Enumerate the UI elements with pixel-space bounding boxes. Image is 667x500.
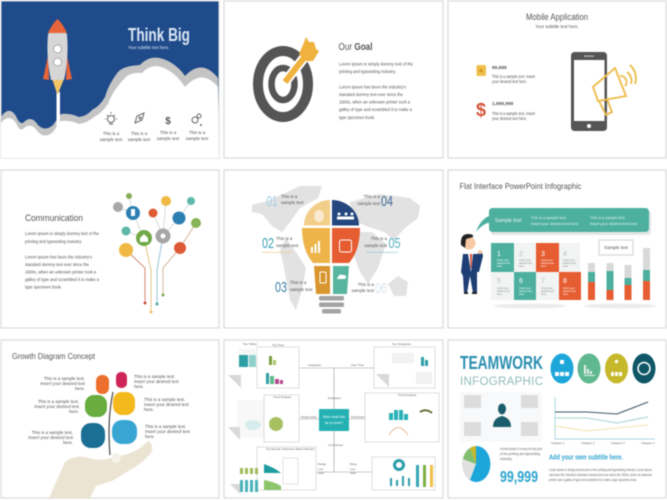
icon: megaphone xyxy=(593,65,636,115)
puzzle grid: Insert your xyxy=(563,259,575,262)
connector labels: Comparison xyxy=(328,443,344,447)
label group xyxy=(100,130,209,142)
subtitle: Your subtitle text here. xyxy=(128,45,170,50)
connector lines xyxy=(299,368,374,472)
puzzle grid: Insert your xyxy=(519,259,531,262)
left labels: This is a sample text. xyxy=(32,430,73,435)
title: growth diagram: Growth Diagram Concept xyxy=(12,351,96,361)
chart card: bottom left: Top Results: Reference Metric Affected xyxy=(266,447,315,451)
left labels: This is a sample text. xyxy=(38,399,79,404)
leaves xyxy=(81,372,137,448)
banner: Insert your desired text here. xyxy=(531,222,579,226)
right labels xyxy=(134,374,190,439)
center box: Who must this xyxy=(323,415,345,419)
puzzle grid: 1 xyxy=(497,251,501,258)
puzzle grid: desired text xyxy=(563,262,576,265)
label 02: sample text xyxy=(276,243,299,248)
body text: Lorem Ipsum is simply dummy text of the xyxy=(339,62,414,66)
stat: 1,999,999: This is a sample text. Insert xyxy=(492,111,536,116)
banner: Sample text xyxy=(495,218,522,224)
line chart: Category 2 xyxy=(581,441,595,445)
puzzle grid xyxy=(491,243,581,300)
label group: This is a xyxy=(189,130,206,135)
connector labels: Relationship xyxy=(301,415,317,419)
line chart: Category 1 xyxy=(551,441,565,445)
connector labels: Many xyxy=(350,462,357,466)
line chart: Category 3 xyxy=(611,441,625,445)
title: our goal: Our Goal xyxy=(338,42,373,53)
puzzle grid: desired text xyxy=(497,290,510,293)
label group: sample text xyxy=(157,136,180,141)
label 05: 05 xyxy=(388,235,400,252)
body text: Lorem Ipsum has been the industry's xyxy=(25,254,93,260)
pie caption: industry. xyxy=(500,457,513,461)
title: flat interface: Flat Interface PowerPoint Infographic xyxy=(460,181,582,191)
banner: This is a sample text. xyxy=(531,216,567,220)
body text: 1500s, when an unknown printer took a xyxy=(25,270,97,274)
banner: Insert your desired text here. xyxy=(590,222,638,226)
illustration: hand xyxy=(49,441,152,498)
puzzle grid: here xyxy=(563,265,569,268)
label 05 xyxy=(365,235,400,253)
chart card: middle left xyxy=(228,395,299,442)
chart card: top right xyxy=(374,342,435,388)
title: mobile application: Mobile Application xyxy=(526,12,588,22)
chart card: bottom right xyxy=(372,457,435,490)
connector labels: Low xyxy=(350,467,356,471)
stat: 1,999,999 xyxy=(492,101,536,121)
stat: 99,999: This is a sample text. Insert xyxy=(492,74,536,79)
line chart: Category 4 xyxy=(641,441,655,445)
light bulb xyxy=(302,200,360,314)
left labels: Insert your desired text xyxy=(34,404,80,409)
icon: light bulb xyxy=(105,112,117,124)
label group: This is a xyxy=(131,131,148,136)
label 04 xyxy=(358,193,393,210)
puzzle grid: 8 xyxy=(563,278,567,285)
pie chart xyxy=(462,446,490,482)
illustration: stem xyxy=(109,392,113,455)
panel: communication xyxy=(1,170,219,328)
label 06 xyxy=(352,280,387,297)
puzzle grid: desired text xyxy=(541,290,554,293)
right labels: Insert your desired text xyxy=(134,379,179,384)
floor shadow xyxy=(494,304,656,308)
puzzle grid: here xyxy=(541,293,547,296)
illustration: seed xyxy=(112,453,120,463)
connector labels: Evaluation xyxy=(328,396,342,400)
title: teamwork: TEAMWORK xyxy=(460,353,543,373)
callout: sample text xyxy=(599,240,633,255)
puzzle grid: Insert your xyxy=(541,259,553,262)
body text xyxy=(549,468,652,482)
body text: type specimen book. xyxy=(25,284,62,290)
pie caption: of the printing and typesetting xyxy=(500,452,540,456)
panel: light bulb xyxy=(224,170,443,328)
label 03: 03 xyxy=(275,279,287,296)
right labels: here. xyxy=(144,407,154,412)
panel: teamwork infographic xyxy=(448,340,666,498)
label 04: This is a xyxy=(364,194,381,199)
puzzle grid: desired text xyxy=(497,262,510,265)
chart card: middle right: Trend Analysis xyxy=(398,393,417,397)
label 03 xyxy=(275,279,313,296)
puzzle grid: desired text xyxy=(519,262,532,265)
left labels: here. xyxy=(69,409,79,414)
label group: sample text xyxy=(186,136,209,141)
right labels: This is a sample text. xyxy=(145,424,186,429)
stat: 1,999,999: your desired text here. xyxy=(492,116,527,121)
label 06: 06 xyxy=(375,280,387,297)
label 05: This is a xyxy=(371,236,388,241)
pie caption xyxy=(500,447,542,461)
body text: printing and typesetting industry. xyxy=(25,239,82,244)
title: infographic: INFOGRAPHIC xyxy=(460,376,543,388)
body text: galley of type and scrambled it to make a xyxy=(339,107,413,112)
body text: 1500s, when an unknown printer took a xyxy=(339,100,411,104)
left labels xyxy=(28,376,86,445)
profile panel xyxy=(460,392,542,442)
icon: dollar: $ xyxy=(165,116,171,127)
chart card: bottom left xyxy=(230,447,316,494)
puzzle grid: Insert your xyxy=(519,287,531,290)
person xyxy=(461,234,483,294)
puzzle grid: 5 xyxy=(497,278,501,285)
connector labels: Low xyxy=(318,467,324,471)
puzzle grid: Insert your xyxy=(541,287,553,290)
chart card: top left: Two Tables xyxy=(243,342,258,346)
label 01: This is a xyxy=(281,194,298,199)
puzzle grid: Insert your xyxy=(497,287,509,290)
label 02: This is a xyxy=(276,236,293,241)
right labels: Insert your desired text xyxy=(145,429,190,434)
icon: gears xyxy=(192,114,202,126)
connector labels: Integration xyxy=(308,363,322,367)
panel: flat interface xyxy=(448,170,666,328)
body text: printer took a galley of type and scrambled it to make a type specimen book. xyxy=(549,478,637,482)
center box xyxy=(319,409,349,431)
panel: growth diagram xyxy=(1,340,219,498)
body text: Lorem Ipsum is simply dummy text of the xyxy=(25,231,100,236)
right labels: here. xyxy=(145,434,155,439)
label 03: This is a xyxy=(290,280,307,285)
callout: sample text: Sample text xyxy=(604,245,629,250)
right labels: This is a sample text. xyxy=(144,397,185,402)
panel: mobile application xyxy=(448,1,666,158)
body text: standard dummy text ever since the xyxy=(25,262,90,267)
label group: sample text xyxy=(128,137,151,142)
icon row xyxy=(550,354,656,384)
left labels: Insert your desired text xyxy=(28,435,74,440)
stacked bar chart xyxy=(588,248,650,300)
subtitle: add your own: Add your own subtitle here. xyxy=(549,452,623,462)
puzzle grid: here xyxy=(519,265,525,268)
world map xyxy=(252,186,420,310)
connector labels: Over Time xyxy=(351,363,364,367)
center box: be is done? xyxy=(325,421,343,425)
puzzle grid: desired text xyxy=(563,290,576,293)
label 01 xyxy=(266,193,304,210)
label 02: 02 xyxy=(262,235,274,252)
label 06: sample text xyxy=(352,288,375,293)
puzzle grid: desired text xyxy=(519,290,532,293)
banner: This is a sample text. xyxy=(590,216,626,220)
left labels: here. xyxy=(75,386,85,391)
puzzle grid: 4 xyxy=(563,251,567,258)
body text: Lorem Ipsum has been the industry's xyxy=(339,84,407,90)
chart card: top left: Top Fives xyxy=(272,343,285,347)
label 03: sample text xyxy=(290,287,313,292)
puzzle grid: here xyxy=(497,265,503,268)
label 01: 01 xyxy=(266,193,278,210)
puzzle grid: here xyxy=(563,293,569,296)
right labels: This is a sample text. xyxy=(134,374,175,379)
banner xyxy=(476,208,651,235)
connector labels: Range xyxy=(318,462,327,466)
body text: galley of type and scrambled it to make a xyxy=(25,277,100,282)
panel: our goal xyxy=(224,1,443,158)
connector labels: Alive xyxy=(350,471,357,475)
body text: printing and typesetting industry. xyxy=(339,69,396,74)
label 02 xyxy=(262,235,299,253)
puzzle grid: here xyxy=(497,293,503,296)
diagram: idea tree xyxy=(113,193,201,314)
puzzle grid: Insert your xyxy=(497,259,509,262)
subtitle: Your subtitle text here. xyxy=(535,24,579,29)
label group: This is a xyxy=(103,131,120,136)
label 01: sample text xyxy=(281,200,304,205)
label 04: sample text xyxy=(358,201,381,206)
icon: dollar: $ xyxy=(476,100,486,120)
puzzle grid: here xyxy=(541,265,547,268)
stat: 99,999: your desired text here. xyxy=(492,79,527,84)
stat: 99,999: 99,999 xyxy=(500,469,538,486)
chart card: middle right xyxy=(365,393,439,442)
connector labels: Alive xyxy=(318,471,325,475)
puzzle grid: 7 xyxy=(541,278,545,285)
chart card: top left xyxy=(228,342,299,388)
cloud: white fill xyxy=(1,66,219,158)
body text: standard dummy text ever since the xyxy=(339,92,404,97)
cloud: grey outline xyxy=(0,56,219,136)
chart card: top right: Key Categories xyxy=(392,342,412,346)
label 04: 04 xyxy=(381,193,393,210)
pie caption: A small sample to convey the key point xyxy=(500,447,542,451)
icon: rocket xyxy=(135,113,144,123)
stat: 99,999: 99,999 xyxy=(492,65,507,71)
puzzle grid: desired text xyxy=(541,262,554,265)
puzzle grid: 3 xyxy=(541,251,545,258)
connector labels: Distribution xyxy=(351,415,365,419)
right labels: here. xyxy=(134,384,144,389)
rocket xyxy=(43,19,72,127)
puzzle grid: 2 xyxy=(519,251,523,258)
body text xyxy=(339,62,414,120)
connector labels xyxy=(301,363,365,475)
label 05: sample text xyxy=(365,243,388,248)
label group: This is a xyxy=(160,130,177,135)
icon: phone xyxy=(571,52,607,131)
icon: yellow badge xyxy=(476,65,486,76)
left labels: Insert your desired text xyxy=(40,381,86,386)
left labels: This is a sample text. xyxy=(44,376,85,381)
puzzle grid: here xyxy=(519,293,525,296)
icon: target with arrow xyxy=(258,37,319,117)
label 06: This is a xyxy=(358,282,375,287)
stat: 1,999,999: 1,999,999 xyxy=(492,101,514,107)
title: think big: Think Big xyxy=(128,25,190,45)
body text: type specimen book. xyxy=(339,115,375,120)
label group: sample text xyxy=(100,137,123,142)
puzzle grid: 6 xyxy=(519,278,523,285)
right labels: Insert your desired text xyxy=(144,402,189,407)
stat: 99,999 xyxy=(492,65,536,84)
puzzle grid: Insert your xyxy=(563,287,575,290)
panel: think big xyxy=(1,1,219,158)
panel: analysis map xyxy=(224,340,443,498)
line chart xyxy=(551,397,655,445)
title: communication: Communication xyxy=(25,213,83,224)
left labels: here. xyxy=(63,440,73,445)
chart card: middle left: Trend Analysis xyxy=(273,395,292,399)
body text xyxy=(25,231,100,290)
